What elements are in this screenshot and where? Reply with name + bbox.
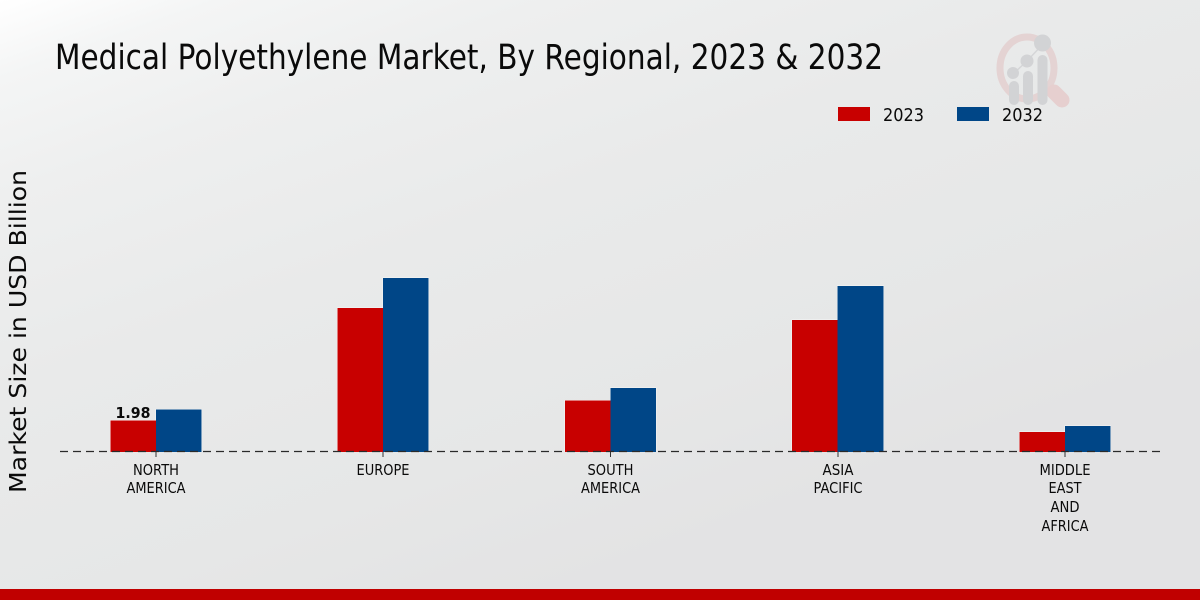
category label: South America: SOUTH: [588, 461, 634, 479]
category label: North America: NORTH: [133, 461, 179, 479]
y axis title: Market Size in USD Billion: [6, 170, 32, 493]
bars: Europe: [338, 278, 428, 452]
bar chart: [110, 278, 1110, 452]
bars: Asia Pacific: [792, 286, 884, 452]
icon: watermark logo: [1000, 34, 1062, 105]
category label: Asia Pacific: PACIFIC: [814, 479, 862, 497]
category label: Middle East and Africa: MIDDLE: [1040, 461, 1090, 479]
x axis baseline: [60, 452, 1160, 457]
category label: Middle East and Africa: AFRICA: [1042, 517, 1089, 535]
bars: Middle East and Africa: [1020, 426, 1110, 452]
category label: North America: AMERICA: [126, 479, 186, 497]
category label: Asia Pacific: ASIA: [822, 461, 854, 479]
category label: Middle East and Africa: AND: [1050, 498, 1080, 516]
legend: 2023: [838, 105, 924, 126]
legend: [838, 105, 1043, 126]
footer bar: [0, 589, 1200, 600]
category label: Europe: EUROPE: [356, 461, 410, 479]
bars: North America: [110, 410, 202, 452]
title: Medical Polyethylene Market, By Regional, 2023 & 2032: [55, 38, 883, 78]
legend: 2032: 2032: [1002, 105, 1043, 126]
legend: 2032: [957, 105, 1043, 126]
legend: 2023: 2023: [883, 105, 924, 126]
category label: Middle East and Africa: EAST: [1048, 479, 1082, 497]
data label: 1.98: [116, 404, 150, 422]
bars: South America: [565, 388, 656, 452]
category label: South America: AMERICA: [581, 479, 640, 497]
